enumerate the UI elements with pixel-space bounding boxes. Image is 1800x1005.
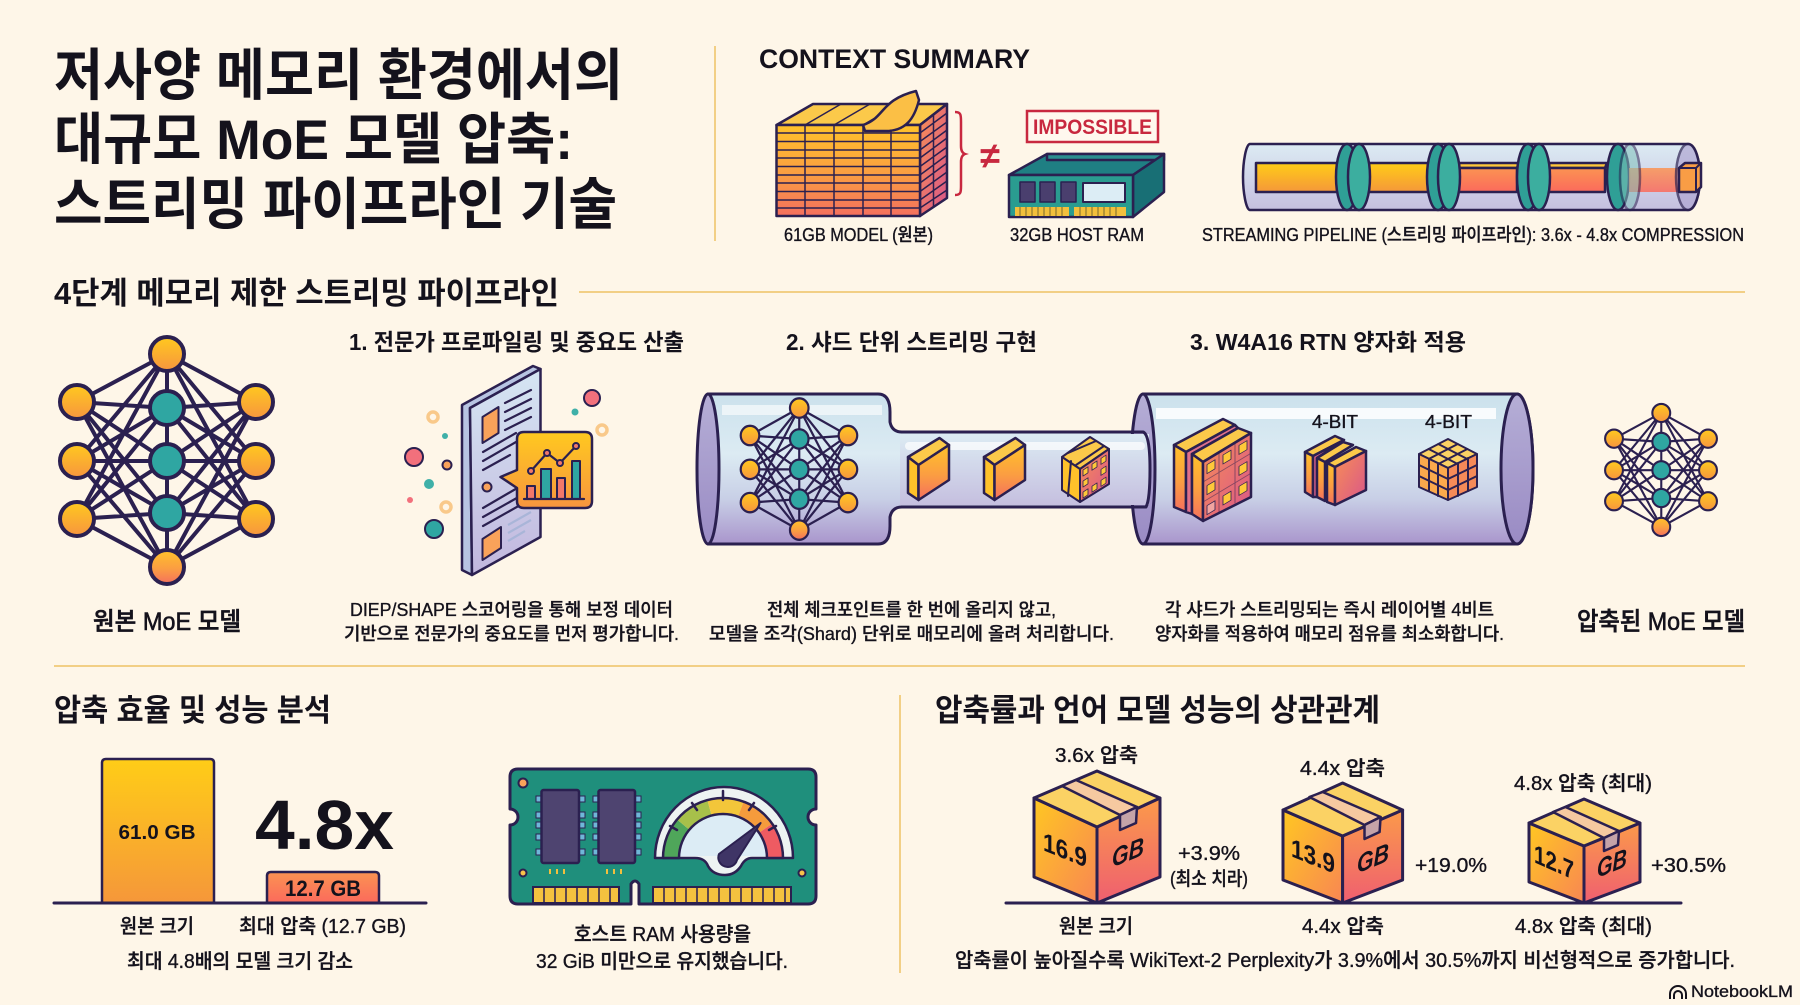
- icon: streaming pipeline tube: [1243, 144, 1701, 210]
- text: step 1 description: [344, 600, 679, 644]
- context labels: [784, 225, 1744, 245]
- icon: 61GB model brick stack: [776, 91, 947, 216]
- label: original model: 원본 MoE 모델: [93, 608, 241, 636]
- axis labels: 4.4x 압축: [1302, 915, 1384, 938]
- 4-bit label 1: 4-BIT: [1312, 412, 1358, 432]
- box: 3.6x: (최소 치라): [1170, 868, 1248, 890]
- box: 3.6x: [1034, 744, 1248, 903]
- title: 저사양 메모리 환경에서의: [54, 44, 623, 107]
- box: 4.8x: 12.7: [1534, 838, 1574, 886]
- box: 3.6x: 16.9: [1043, 827, 1087, 874]
- label: impossible: IMPOSSIBLE: [1033, 116, 1152, 139]
- text: step 2 description: 전체 체크포인트를 한 번에 올리지 않고,: [767, 600, 1056, 620]
- text: step 1 description: 기반으로 전문가의 중요도를 먼저 평가합니다.: [344, 624, 679, 644]
- icon: profiling document: [405, 366, 607, 575]
- label: impossible: [1027, 111, 1158, 142]
- logo: NotebookLM: NotebookLM: [1691, 982, 1793, 1001]
- network inside pipe: [741, 398, 857, 540]
- chart: original MoE network: [60, 337, 273, 584]
- 4-bit cube: [1419, 439, 1477, 500]
- label: compressed model: 압축된 MoE 모델: [1577, 608, 1745, 636]
- text: correlation caption: 압축률이 높아질수록 WikiText-2 Perplexity가 3.9%에서 30.5%까지 비선형적으로 증가합니다.: [955, 949, 1735, 972]
- heading: step 3: 3. W4A16 RTN 양자화 적용: [1190, 329, 1466, 355]
- box: 3.6x: +3.9%: [1178, 843, 1240, 865]
- bar: original size: 61.0 GB: [118, 822, 196, 844]
- chart: compressed MoE network: [1605, 404, 1717, 536]
- context labels: 61GB MODEL (원본): [784, 225, 933, 245]
- bar: original size: [102, 759, 214, 903]
- chart: size comparison bars: 원본 크기: [120, 915, 194, 938]
- heading: context summary: CONTEXT SUMMARY: [759, 44, 1030, 74]
- 4-bit slab stack: [1305, 436, 1366, 505]
- box: 4.4x: 13.9: [1291, 833, 1335, 880]
- axis labels: [1059, 915, 1652, 938]
- text: step 3 description: 양자화를 적용하여 매모리 점유를 최소화합니다.: [1155, 624, 1504, 644]
- box: 4.4x: 4.4x 압축: [1300, 757, 1385, 780]
- title: 스트리밍 파이프라인 기술: [54, 173, 617, 236]
- context labels: STREAMING PIPELINE (스트리밍 파이프라인): 3.6x - 4.8x COMPRESSION: [1202, 225, 1744, 245]
- shard 2: [984, 438, 1025, 500]
- box: 4.4x: [1283, 757, 1487, 903]
- text: RAM usage caption: 호스트 RAM 사용량을: [574, 923, 751, 946]
- box: 4.8x: GB: [1597, 843, 1627, 884]
- large shard stack: [1174, 419, 1251, 522]
- chart: size comparison bars: 최대 압축 (12.7 GB): [239, 915, 406, 938]
- icon: red brace and not-equal sign: [955, 112, 1000, 195]
- 4-bit label 2: 4-BIT: [1425, 412, 1472, 432]
- text: step 1 description: DIEP/SHAPE 스코어링을 통해 보정 데이터: [350, 600, 673, 620]
- text: step 2 description: 모델을 조각(Shard) 단위로 매모리에 올려 처리합니다.: [709, 624, 1114, 644]
- box: 4.8x: 4.8x 압축 (최대): [1514, 772, 1652, 795]
- box: 4.4x: +19.0%: [1415, 855, 1487, 877]
- box: 3.6x: GB: [1112, 831, 1144, 873]
- heading: correlation: 압축률과 언어 모델 성능의 상관관계: [935, 693, 1380, 728]
- shard 3: [1062, 437, 1109, 502]
- box: 4.8x: +30.5%: [1651, 855, 1726, 877]
- heading: compression efficiency: 압축 효율 및 성능 분석: [54, 693, 331, 728]
- text: RAM usage caption: [536, 923, 788, 973]
- text: step 3 description: [1155, 600, 1504, 644]
- icon: RAM board with gauge: [510, 769, 816, 904]
- title: 대규모 MoE 모델 압축:: [54, 108, 573, 171]
- context labels: 32GB HOST RAM: [1010, 225, 1144, 245]
- metric: 4.8x: 4.8x: [255, 786, 394, 864]
- text: RAM usage caption: 32 GiB 미만으로 유지했습니다.: [536, 950, 788, 973]
- axis labels: 원본 크기: [1059, 915, 1133, 938]
- shard 1: [908, 438, 949, 500]
- heading: step 1: 1. 전문가 프로파일링 및 중요도 산출: [349, 329, 684, 355]
- title: [54, 44, 623, 236]
- chart: compression boxes: [1006, 744, 1726, 938]
- text: step 3 description: 각 샤드가 스트리밍되는 즉시 레이어별 4비트: [1165, 600, 1494, 620]
- heading: step 2: 2. 샤드 단위 스트리밍 구현: [786, 329, 1037, 355]
- bar: compressed size: [267, 872, 379, 903]
- box: 4.4x: GB: [1357, 837, 1389, 879]
- icon: 32GB host RAM: [1009, 154, 1164, 217]
- box: 3.6x: 3.6x 압축: [1055, 744, 1138, 767]
- bar: compressed size: 12.7 GB: [285, 876, 361, 901]
- chart: size comparison bars: 최대 4.8배의 모델 크기 감소: [127, 950, 353, 973]
- text: step 2 description: [709, 600, 1114, 644]
- icon: red brace and not-equal sign: ≠: [980, 135, 1000, 176]
- heading: 4-stage pipeline: 4단계 메모리 제한 스트리밍 파이프라인: [54, 276, 559, 311]
- box: 4.8x: [1514, 772, 1726, 903]
- chart: size comparison bars: [54, 759, 426, 973]
- pipe body: [697, 394, 1533, 544]
- axis labels: 4.8x 압축 (최대): [1515, 915, 1652, 938]
- diagram: streaming pipe: [697, 394, 1533, 544]
